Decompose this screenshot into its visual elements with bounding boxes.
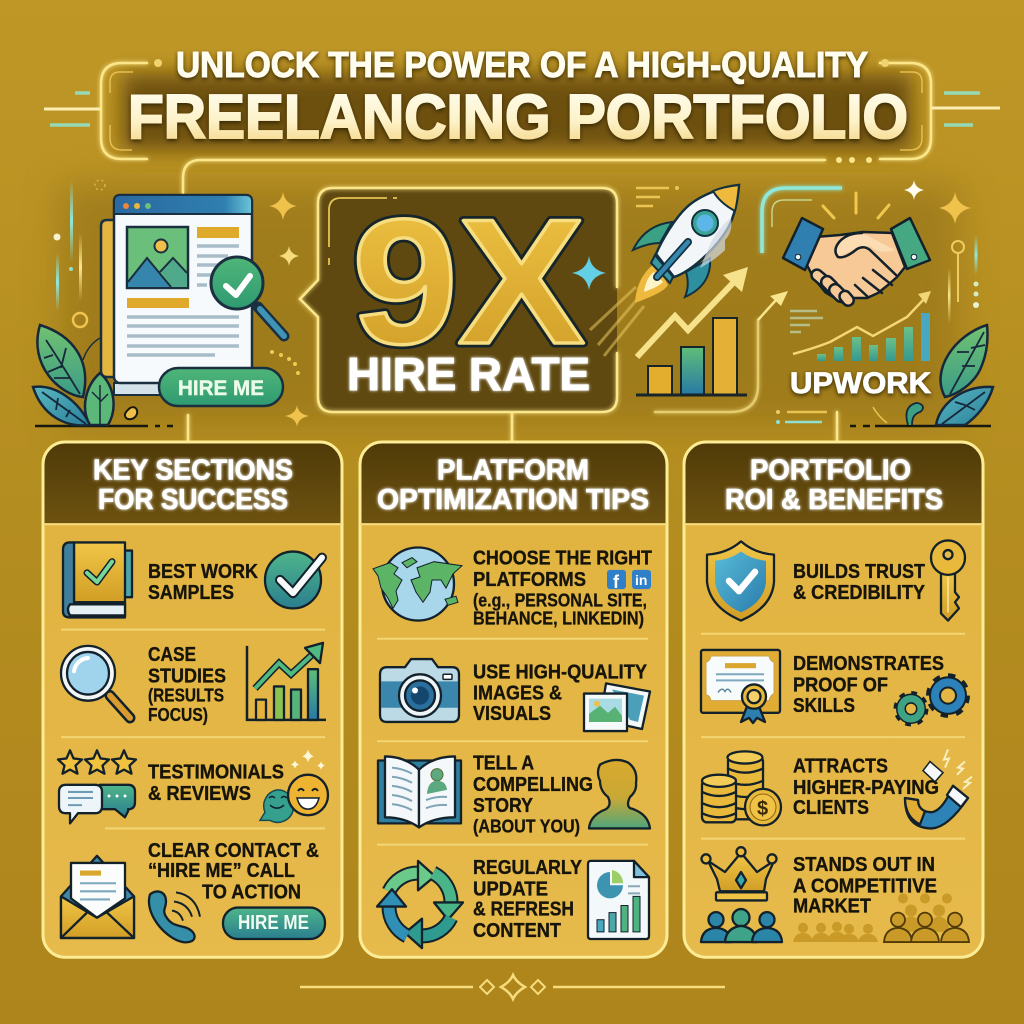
icon: gears bbox=[896, 676, 967, 724]
icon: facebook and linkedin badges: in bbox=[635, 572, 647, 588]
item: update and refresh: UPDATE bbox=[473, 878, 548, 900]
item: high-quality images: VISUALS bbox=[473, 703, 551, 725]
item: case studies: FOCUS) bbox=[148, 705, 208, 725]
icon: magnifying glass bbox=[61, 646, 130, 718]
heading bbox=[93, 453, 293, 515]
item: update and refresh: CONTENT bbox=[473, 920, 562, 942]
hero box: 9X hire rate bbox=[272, 182, 617, 412]
item: builds trust bbox=[707, 540, 965, 621]
heading bbox=[725, 453, 943, 515]
item: attracts higher-paying clients: ATTRACTS bbox=[793, 756, 888, 778]
item: builds trust: BUILDS TRUST bbox=[793, 561, 926, 583]
icon: speech bubbles bbox=[59, 785, 135, 823]
icon: portfolio browser window bbox=[101, 195, 252, 395]
icon: handshake bbox=[783, 193, 930, 308]
icon: key bbox=[931, 540, 965, 621]
item: demonstrates proof of skills: DEMONSTRATES bbox=[793, 653, 944, 675]
icon: smiling faces bbox=[260, 749, 328, 822]
icon: person silhouette bbox=[589, 760, 650, 828]
item: update and refresh: REGULARLY bbox=[473, 857, 583, 879]
hire rate label: HIRE RATE bbox=[347, 348, 590, 400]
item: testimonials and reviews: & REVIEWS bbox=[148, 783, 251, 805]
panel: platform optimization tips bbox=[360, 442, 667, 957]
item: tell a compelling story: TELL A bbox=[473, 752, 534, 775]
icon: left leaves bbox=[33, 325, 114, 425]
chart: rising bars with arrow bbox=[636, 186, 748, 395]
button: hire me: HIRE ME bbox=[238, 912, 309, 934]
icon: sparkles bbox=[269, 180, 971, 427]
icon: crown bbox=[702, 847, 776, 900]
icon: facebook and linkedin badges bbox=[607, 570, 651, 592]
icon: rocket bbox=[590, 185, 739, 356]
icon: small gold crowd bbox=[793, 922, 878, 942]
icon: outlined gold crowd bbox=[884, 893, 969, 942]
icon: photos bbox=[584, 683, 650, 731]
title banner bbox=[44, 44, 1000, 159]
item: update and refresh: & REFRESH bbox=[473, 899, 574, 921]
9X figure: 9X bbox=[352, 182, 585, 381]
icon: report document bbox=[588, 861, 649, 939]
item: stands out in a competitive market: A COMPETITIVE bbox=[793, 875, 937, 897]
item: attracts higher-paying clients: CLIENTS bbox=[793, 797, 869, 819]
item: high-quality images: IMAGES & bbox=[473, 683, 562, 705]
icon: open book bbox=[378, 756, 461, 827]
icon: notebook bbox=[63, 542, 132, 617]
icon: envelope bbox=[61, 856, 134, 938]
heading: ROI & BENEFITS bbox=[725, 483, 943, 515]
footer ornament bbox=[300, 975, 725, 999]
item: tell a compelling story: STORY bbox=[473, 795, 534, 817]
item: choose the right platforms: (e.g., PERSONAL SITE, bbox=[473, 590, 647, 610]
9X figure: 9X bbox=[352, 182, 585, 381]
icon: right leaves bbox=[906, 325, 993, 425]
item: high-quality images: USE HIGH-QUALITY bbox=[473, 661, 648, 683]
item: builds trust: & CREDIBILITY bbox=[793, 582, 926, 604]
chart: results bars bbox=[247, 643, 326, 720]
title line 2: FREELANCING PORTFOLIO bbox=[128, 83, 908, 152]
icon: coin stacks bbox=[702, 751, 781, 825]
item: demonstrates proof of skills: PROOF OF bbox=[793, 674, 888, 697]
icon: three stars bbox=[58, 750, 136, 774]
item: best work samples: SAMPLES bbox=[148, 582, 234, 604]
heading: PLATFORM bbox=[437, 453, 589, 486]
item: high-quality images bbox=[380, 659, 650, 731]
item: stands out in a competitive market bbox=[701, 847, 969, 942]
item: choose the right platforms bbox=[373, 548, 653, 629]
item: testimonials and reviews bbox=[58, 749, 328, 823]
item: case studies bbox=[61, 643, 326, 725]
item: choose the right platforms: BEHANCE, LINKEDIN) bbox=[473, 608, 644, 629]
panel: portfolio roi and benefits bbox=[684, 442, 983, 957]
icon: shield bbox=[707, 541, 774, 621]
connector lines between hero and panels bbox=[35, 157, 991, 442]
panel: key sections for success bbox=[43, 442, 342, 957]
icon: coin stacks: $ bbox=[757, 798, 768, 820]
heading bbox=[377, 453, 649, 515]
item: clear contact call to action: TO ACTION bbox=[202, 881, 301, 903]
title line 1: UNLOCK THE POWER OF A HIGH-QUALITY bbox=[176, 44, 868, 85]
icon: magnet bbox=[905, 749, 972, 828]
item: choose the right platforms: CHOOSE THE RIGHT bbox=[473, 548, 653, 570]
item: case studies: STUDIES bbox=[148, 665, 226, 687]
icon: teal team bbox=[701, 909, 782, 942]
item: demonstrates proof of skills bbox=[701, 650, 967, 724]
item: demonstrates proof of skills: SKILLS bbox=[793, 695, 855, 717]
item: attracts higher-paying clients: HIGHER-PAYING bbox=[793, 777, 939, 799]
icon: phone bbox=[149, 891, 200, 942]
item: case studies: CASE bbox=[148, 644, 196, 666]
item: clear contact call to action: “HIRE ME” CALL bbox=[148, 860, 295, 882]
item: stands out in a competitive market: STANDS OUT IN bbox=[793, 854, 935, 876]
icon: certificate bbox=[701, 650, 780, 723]
item: best work samples bbox=[63, 542, 322, 617]
item: clear contact call to action: CLEAR CONTACT & bbox=[148, 840, 319, 862]
item: tell a compelling story bbox=[378, 752, 650, 837]
heading: PORTFOLIO bbox=[750, 453, 911, 486]
icon: check badge bbox=[265, 552, 322, 608]
icon: globe bbox=[373, 548, 462, 621]
chart: upwork growth bbox=[790, 291, 931, 400]
item: choose the right platforms: PLATFORMS bbox=[473, 569, 586, 591]
button: hire me bbox=[223, 908, 325, 939]
item: attracts higher-paying clients bbox=[702, 749, 972, 828]
button: hire me bbox=[159, 368, 283, 406]
background shading behind hero bbox=[60, 185, 960, 425]
item: stands out in a competitive market: MARKET bbox=[793, 895, 872, 918]
item: testimonials and reviews: TESTIMONIALS bbox=[148, 762, 284, 784]
item: update and refresh bbox=[377, 857, 649, 948]
icon: camera bbox=[380, 659, 459, 722]
icon: facebook and linkedin badges: f bbox=[613, 572, 620, 592]
item: tell a compelling story: (ABOUT YOU) bbox=[473, 816, 580, 837]
heading: OPTIMIZATION TIPS bbox=[377, 483, 649, 515]
icon: refresh arrows bbox=[377, 861, 463, 948]
item: clear contact call to action bbox=[61, 840, 325, 942]
heading: FOR SUCCESS bbox=[98, 483, 288, 515]
item: best work samples: BEST WORK bbox=[148, 561, 258, 583]
item: tell a compelling story: COMPELLING bbox=[473, 774, 593, 796]
item: case studies: (RESULTS bbox=[148, 686, 224, 706]
button: hire me: HIRE ME bbox=[178, 377, 264, 400]
icon: magnifier with check bbox=[211, 257, 284, 336]
heading: KEY SECTIONS bbox=[93, 453, 293, 486]
upwork label: UPWORK bbox=[790, 367, 931, 400]
